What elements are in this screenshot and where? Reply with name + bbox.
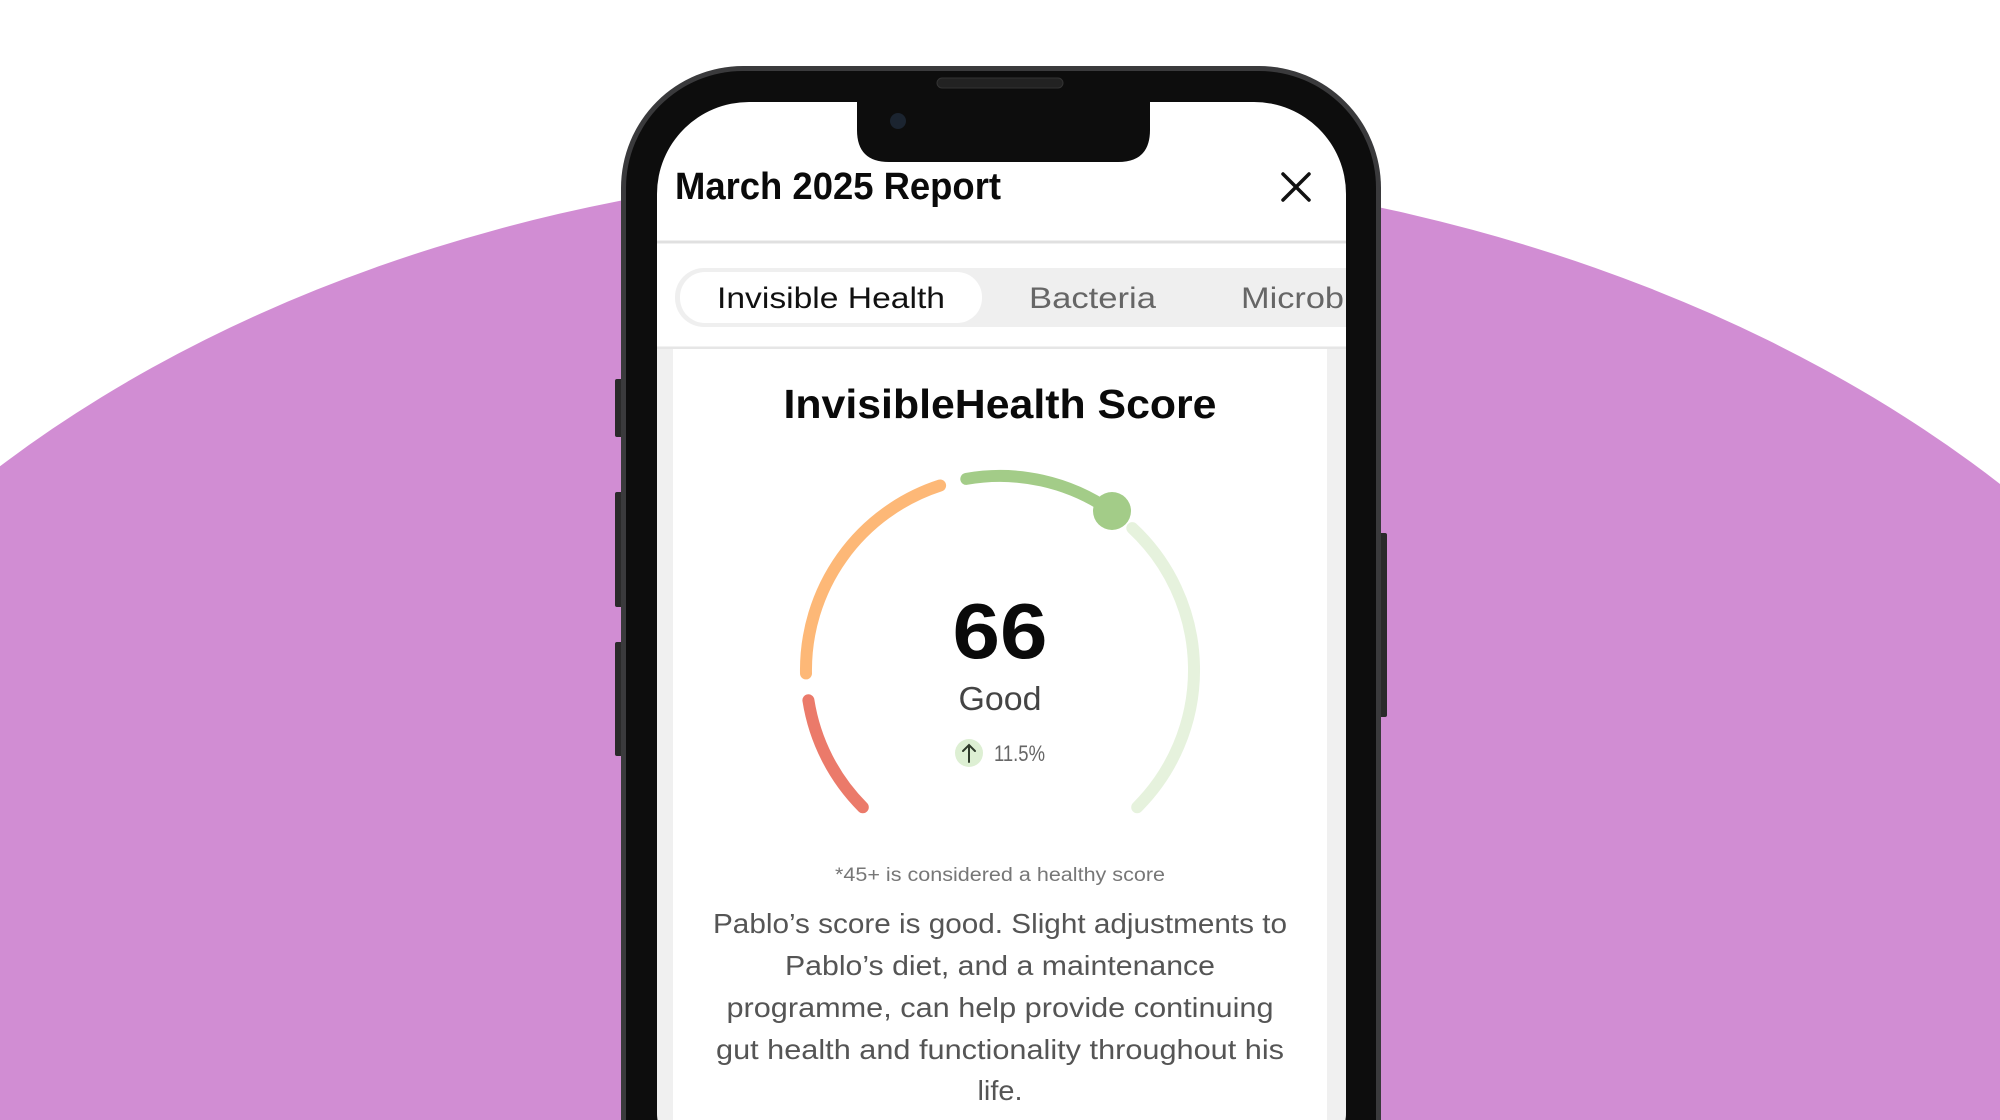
description paragraph: Pablo’s diet, and a maintenance <box>785 950 1215 981</box>
description paragraph: Pablo’s score is good. Slight adjustments to <box>713 908 1287 939</box>
tab bar: Microb <box>1241 282 1344 315</box>
score value: 66 <box>952 587 1048 675</box>
description paragraph: life. <box>978 1075 1022 1106</box>
notch <box>850 95 1150 162</box>
active tab <box>680 272 982 323</box>
change indicator: 11.5% <box>994 741 1045 766</box>
description paragraph <box>713 908 1287 1106</box>
tab bar <box>675 268 1395 327</box>
side buttons <box>615 379 1387 756</box>
gauge chart <box>806 476 1194 807</box>
camera <box>890 113 906 129</box>
card title: InvisibleHealth Score <box>784 381 1216 427</box>
tab bar: Bacteria <box>1029 282 1156 315</box>
header: title: March 2025 Report <box>675 166 1001 208</box>
description paragraph: gut health and functionality throughout his <box>716 1034 1284 1065</box>
footnote: *45+ is considered a healthy score <box>835 865 1165 886</box>
description paragraph: programme, can help provide continuing <box>726 992 1274 1023</box>
screen <box>657 102 1395 1120</box>
score label: Good <box>958 680 1042 717</box>
speaker <box>937 78 1063 88</box>
phone device <box>615 66 1395 1120</box>
change indicator <box>955 739 1045 767</box>
icon: close <box>1283 174 1309 200</box>
tab bar: Invisible Health <box>717 282 945 315</box>
score card <box>673 349 1327 1120</box>
